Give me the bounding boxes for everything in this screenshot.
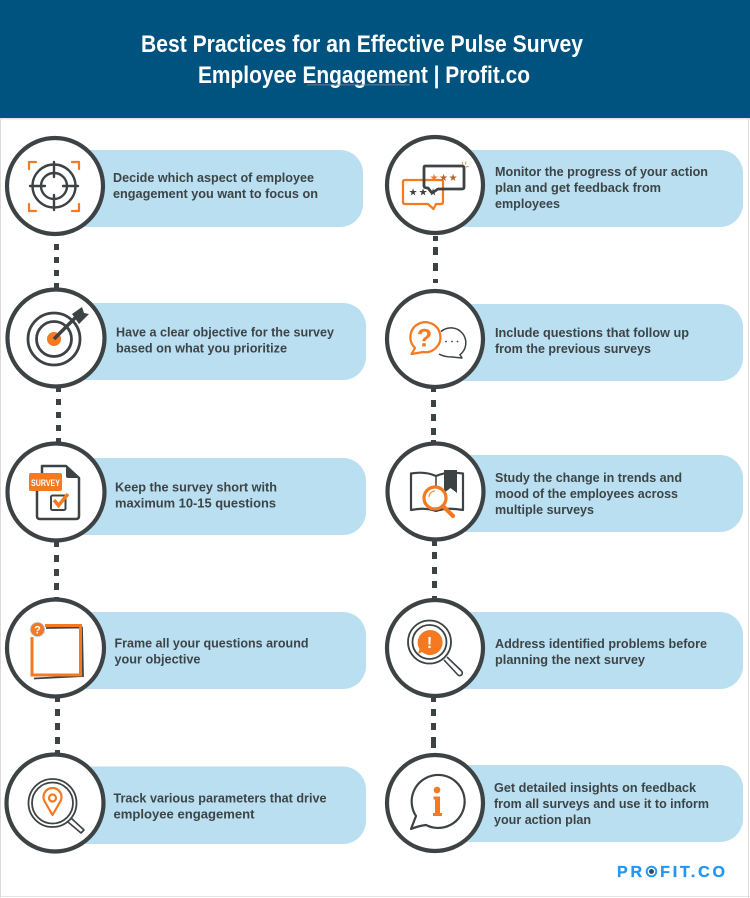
text: step 2: Have a clear objective for the survey [116, 324, 335, 340]
text: step 10: Get detailed insights on feedback [494, 780, 697, 795]
text: step 3 [115, 480, 277, 510]
icon: dartboard with arrow [28, 307, 89, 365]
text: step 5 [114, 790, 326, 822]
icon: magnifier with alert [408, 620, 462, 676]
connector: right column [431, 236, 438, 748]
title: Best Practices for an Effective Pulse Survey [141, 31, 584, 58]
text: step 8: Study the change in trends and [495, 470, 682, 485]
panel: left step 3 [8, 444, 366, 540]
text: step 9 [495, 636, 707, 667]
text: step 9: planning the next survey [495, 652, 646, 667]
panel: right step 7 [387, 291, 743, 387]
title [141, 31, 584, 89]
icon: magnifier with alert: ! [427, 635, 432, 652]
text: step 7: Include questions that follow up [495, 325, 689, 340]
text: step 1: Decide which aspect of employee [113, 170, 314, 185]
text: step 5: Track various parameters that drive [114, 790, 326, 806]
text: step 1: engagement you want to focus on [113, 186, 318, 201]
panel: right step 6 [387, 137, 743, 233]
icon: rating speech bubbles [403, 162, 468, 209]
logo: Profit.co: PROFIT.CO [617, 864, 725, 881]
text: step 2: based on what you prioritize [116, 340, 287, 356]
text: step 7 [495, 325, 689, 356]
panel: right step 9 [387, 600, 743, 696]
text: step 4: Frame all your questions around [114, 636, 308, 650]
text: step 6 [495, 164, 708, 211]
text: step 6: employees [495, 196, 560, 211]
text: step 9: Address identified problems before [495, 636, 707, 651]
icon: book with magnifier [411, 470, 463, 516]
header banner [0, 0, 750, 118]
text: step 6: plan and get feedback from [495, 180, 661, 195]
icon: magnifier with location pin [28, 779, 84, 833]
icon: rating speech bubbles: ★ [429, 187, 438, 197]
text: step 4 [114, 636, 308, 666]
text: step 6: Monitor the progress of your action [495, 164, 708, 179]
icon: rating speech bubbles: ★ [419, 187, 428, 197]
icon: information bubble [411, 775, 465, 829]
text: step 2 [116, 324, 335, 356]
text: step 10 [494, 780, 709, 827]
text: step 4: your objective [114, 652, 200, 666]
text: step 7: from the previous surveys [495, 341, 651, 356]
panel: left step 2 [8, 290, 366, 386]
text: step 10: your action plan [494, 812, 591, 827]
icon: question and chat bubbles [410, 322, 466, 358]
title: Employee Engagement | Profit.co [198, 62, 530, 89]
text: step 5: employee engagement [114, 806, 255, 822]
text: step 10: from all surveys and use it to inform [494, 796, 709, 811]
text: step 8 [495, 470, 682, 517]
text: step 1 [113, 170, 318, 201]
connector: left column [54, 233, 61, 753]
panel: right step 8 [388, 444, 743, 540]
icon: rating speech bubbles: ★ [449, 172, 458, 182]
icon: rating speech bubbles: ★ [430, 172, 439, 182]
text: step 8: multiple surveys [495, 502, 594, 517]
icon: survey document [29, 466, 79, 519]
icon: question frame: ? [34, 624, 41, 636]
icon: rating speech bubbles: ★ [440, 172, 449, 182]
panel: left step 4 [7, 600, 366, 696]
panel: right step 10 [387, 755, 743, 851]
icon: question frame [30, 622, 83, 678]
panel: left step 5 [6, 754, 366, 852]
icon: question and chat bubbles: ? [417, 324, 432, 352]
icon: rating speech bubbles: ★ [409, 187, 418, 197]
text: step 3: Keep the survey short with [115, 480, 277, 494]
text: step 8: mood of the employees across [495, 486, 678, 501]
panel: left step 1 [7, 138, 363, 234]
text: step 3: maximum 10-15 questions [115, 496, 276, 510]
icon: survey document: SURVEY [31, 478, 60, 489]
icon: target crosshair [29, 162, 79, 211]
